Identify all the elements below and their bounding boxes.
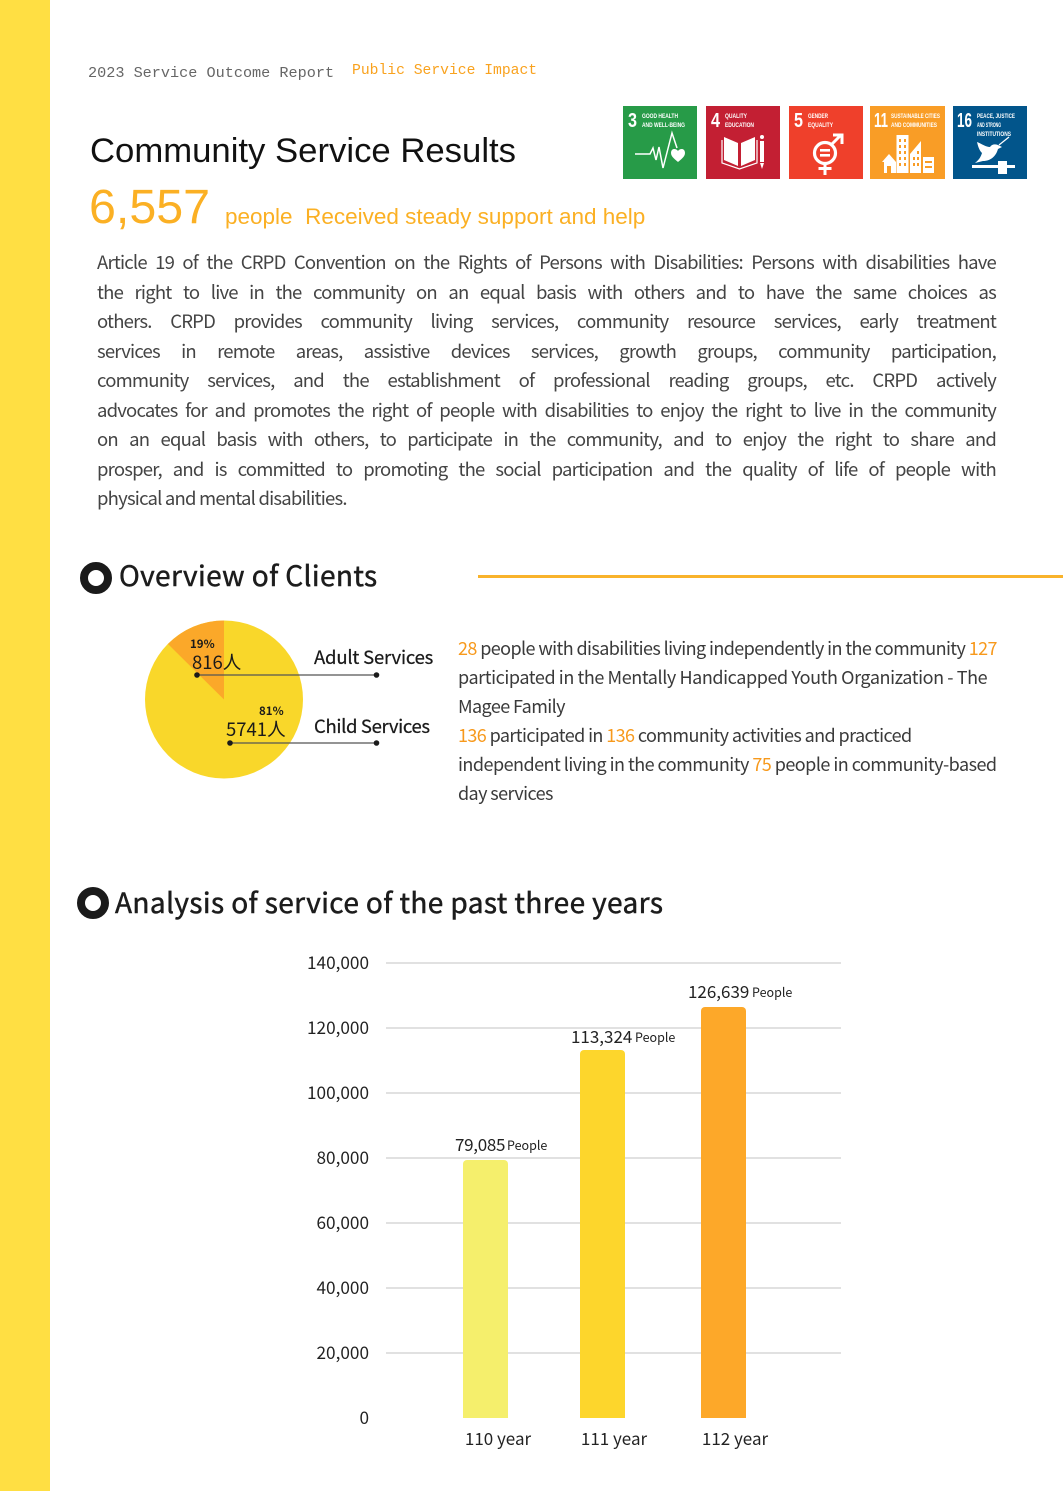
heading rule bbox=[478, 575, 1063, 578]
icon: SDG 5 gender equality: 5 bbox=[794, 110, 803, 132]
body paragraph: physical and mental disabilities. bbox=[97, 485, 347, 511]
y axis labels: 0 bbox=[359, 1404, 369, 1429]
icon: SDG 16 peace and justice: 16 bbox=[957, 110, 972, 132]
icon: SDG 11 sustainable cities: AND COMMUNITIES bbox=[891, 122, 937, 129]
y axis labels: 100,000 bbox=[307, 1079, 369, 1104]
body paragraph: Article 19 of the CRPD Convention on the Rights of Persons with Disabilities: Persons with disabilities have bbox=[97, 249, 996, 275]
icon: SDG 3 good health: 3 bbox=[628, 110, 637, 132]
icon: SDG 16 peace and justice: INSTITUTIONS bbox=[977, 131, 1011, 138]
bar: 112 year bbox=[701, 1007, 746, 1418]
x axis labels: 111 year bbox=[581, 1425, 648, 1450]
title: Community Service Results bbox=[90, 132, 516, 170]
adult share labels: 19% bbox=[190, 636, 215, 652]
icon: SDG 4 quality education bbox=[706, 106, 780, 179]
clients description: 28 people with disabilities living independently in the community 127 bbox=[458, 635, 997, 661]
body paragraph bbox=[97, 249, 996, 511]
icon: SDG 3 good health: AND WELL-BEING bbox=[642, 122, 685, 129]
section heading: analysis of service bbox=[77, 882, 663, 922]
icon: ring bullet bbox=[80, 562, 112, 594]
clients description: independent living in the community 75 people in community-based bbox=[458, 751, 997, 777]
clients description: 136 participated in 136 community activities and practiced bbox=[458, 722, 912, 748]
icon: SDG 3 good health: GOOD HEALTH bbox=[642, 113, 678, 120]
clients description bbox=[458, 635, 997, 806]
x axis labels bbox=[465, 1425, 769, 1450]
y axis labels: 80,000 bbox=[317, 1144, 369, 1169]
y axis labels bbox=[307, 949, 369, 1429]
report label: 2023 Service Outcome Report bbox=[88, 64, 334, 82]
child leader line bbox=[227, 740, 379, 746]
value label: 112 year: 126,639 bbox=[688, 978, 749, 1003]
icon: ring bullet bbox=[77, 887, 109, 919]
yellow side band bbox=[0, 0, 50, 1491]
icon: SDG 4 quality education: 4 bbox=[711, 110, 721, 132]
y axis labels: 120,000 bbox=[307, 1014, 369, 1039]
adult share labels bbox=[190, 636, 241, 675]
icon: SDG 16 peace and justice bbox=[953, 106, 1027, 179]
child share labels: 81% bbox=[259, 703, 284, 719]
clients description: participated in the Mentally Handicapped Youth Organization - The bbox=[458, 664, 987, 690]
value label: 111 year: 113,324 bbox=[571, 1023, 632, 1048]
child share labels bbox=[226, 703, 286, 742]
section label: public service impact: Public Service Impact bbox=[352, 63, 537, 79]
clients description: day services bbox=[458, 780, 553, 806]
icon: SDG 3 good health bbox=[623, 106, 697, 179]
body paragraph: services in remote areas, assistive devices services, growth groups, community participation, bbox=[97, 338, 996, 364]
icon: SDG 4 quality education: EDUCATION bbox=[725, 122, 754, 129]
y axis labels: 60,000 bbox=[317, 1209, 369, 1234]
bar chart: service over three years bbox=[307, 949, 841, 1450]
icon: SDG 11 sustainable cities: 11 bbox=[874, 110, 888, 132]
body paragraph: community services, and the establishment of professional reading groups, etc. CRPD actively bbox=[97, 367, 996, 393]
icon: SDG 11 sustainable cities: SUSTAINABLE CITIES bbox=[891, 113, 940, 120]
headline statistic bbox=[89, 180, 645, 234]
body paragraph: prosper, and is committed to promoting the social participation and the quality of life of people with bbox=[97, 456, 996, 482]
body paragraph: the right to live in the community on an equal basis with others and to have the same choices as bbox=[97, 278, 996, 304]
y axis labels: 40,000 bbox=[317, 1274, 369, 1299]
x axis labels: 112 year bbox=[702, 1425, 769, 1450]
section heading: overview of clients bbox=[80, 555, 378, 595]
statistic caption: people Received steady support and help bbox=[225, 204, 645, 229]
heading text: Overview of Clients bbox=[119, 555, 378, 595]
value label: 111 year bbox=[571, 1023, 675, 1048]
bar: 110 year bbox=[463, 1160, 508, 1418]
icon: SDG 11 sustainable cities bbox=[870, 106, 945, 179]
pie slice: child services bbox=[145, 620, 303, 778]
body paragraph: advocates for and promotes the right of people with disabilities to enjoy the right to live in the community bbox=[97, 396, 996, 422]
SDG icons row bbox=[623, 106, 1027, 179]
big number: 6,557 bbox=[89, 180, 210, 234]
y axis labels: 140,000 bbox=[307, 949, 369, 974]
value label: 110 year: 79,085 bbox=[455, 1131, 505, 1156]
x axis labels: 110 year bbox=[465, 1425, 532, 1450]
icon: SDG 4 quality education: QUALITY bbox=[725, 113, 748, 120]
value label: 110 year bbox=[455, 1131, 547, 1156]
label: child services: Child Services bbox=[314, 713, 430, 739]
adult leader line bbox=[194, 672, 379, 678]
value label: 112 year bbox=[688, 978, 792, 1003]
heading text: Analysis of service of the past three years bbox=[115, 882, 663, 922]
value label: 112 year: People bbox=[752, 982, 792, 1001]
icon: SDG 5 gender equality bbox=[789, 106, 863, 179]
clients description: Magee Family bbox=[458, 693, 565, 719]
child share labels: 5741人 bbox=[226, 716, 286, 742]
label: adult services: Adult Services bbox=[314, 644, 433, 670]
icon: SDG 5 gender equality: EQUALITY bbox=[808, 122, 833, 129]
body paragraph: others. CRPD provides community living services, community resource services, early treatment bbox=[97, 308, 996, 334]
icon: SDG 5 gender equality: GENDER bbox=[808, 113, 828, 120]
bar: 111 year bbox=[580, 1050, 625, 1418]
pie chart: clients bbox=[145, 620, 433, 778]
adult share labels: 816人 bbox=[192, 649, 241, 675]
icon: SDG 16 peace and justice: AND STRONG bbox=[977, 122, 1001, 129]
value label: 110 year: People bbox=[507, 1135, 547, 1154]
y axis labels: 20,000 bbox=[317, 1339, 369, 1364]
pie slice: adult services bbox=[168, 620, 224, 700]
body paragraph: on an equal basis with others, to participate in the community, and to enjoy the right to share and bbox=[97, 426, 996, 452]
value label: 111 year: People bbox=[635, 1027, 675, 1046]
